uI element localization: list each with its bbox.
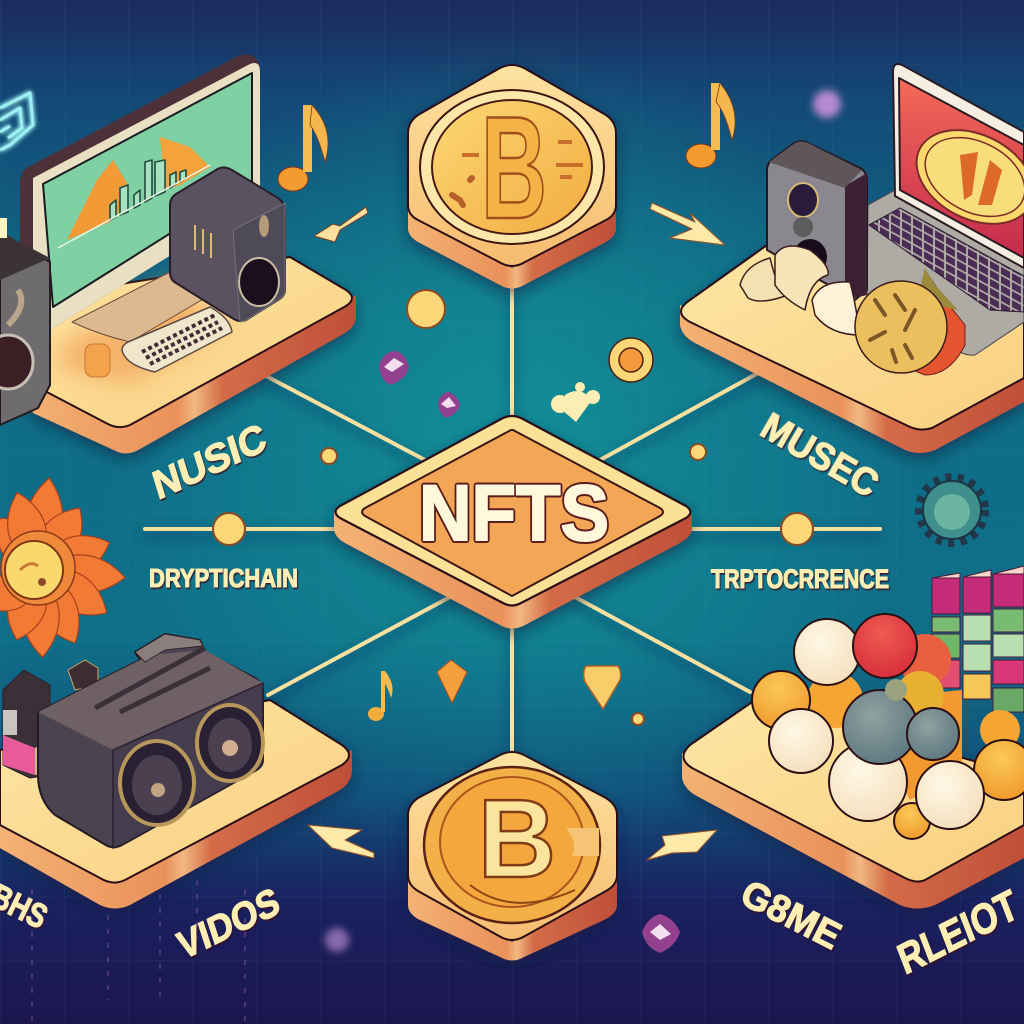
arrow bottom-right bbox=[647, 830, 717, 860]
gear badge icon bbox=[920, 478, 984, 542]
arrow bottom-left bbox=[308, 825, 374, 858]
coin letter: B bbox=[481, 86, 547, 249]
labels bbox=[0, 405, 1024, 983]
ring icon bbox=[609, 338, 653, 382]
glowing purple orbs bbox=[325, 90, 841, 952]
connector lines bbox=[145, 285, 880, 752]
platform bbox=[20, 257, 356, 453]
arrow top-left bbox=[314, 207, 368, 242]
panel: top-left platform with monitor and speakers bbox=[0, 55, 356, 453]
title: NFTS bbox=[419, 468, 609, 557]
platform bbox=[0, 700, 352, 908]
monitor bbox=[20, 55, 260, 342]
small boxes bbox=[3, 660, 98, 778]
label MUSEC: MUSEC bbox=[754, 405, 885, 506]
bottom coin hexagon bbox=[408, 752, 617, 960]
arrow top-right bbox=[650, 203, 725, 245]
speaker bbox=[767, 141, 867, 300]
label TRPTOCRRENCE: TRPTOCRRENCE bbox=[711, 564, 889, 594]
left speaker bbox=[0, 218, 50, 425]
cut tomato bbox=[855, 268, 965, 375]
node dots bbox=[213, 290, 813, 725]
top coin hexagon bbox=[408, 65, 616, 288]
spheres bbox=[752, 614, 1024, 839]
heart icon bbox=[551, 382, 600, 422]
music note top-left bbox=[278, 105, 328, 191]
label DRYPTICHAIN: DRYPTICHAIN bbox=[149, 563, 298, 593]
panel: top-right platform with laptop, speaker and food bbox=[680, 64, 1024, 453]
laptop bbox=[867, 64, 1024, 355]
speaker bbox=[170, 168, 285, 322]
platform bbox=[680, 245, 1024, 453]
keyboard bbox=[122, 307, 232, 372]
coin letter: B bbox=[478, 777, 556, 901]
neon circuit icon bbox=[0, 93, 33, 150]
orange gem icons bbox=[437, 660, 621, 709]
music note bottom bbox=[368, 671, 393, 721]
label G8ME: G8ME bbox=[734, 873, 847, 958]
panel: bottom-right platform with spheres and bars bbox=[682, 566, 1024, 908]
title: NFTS bbox=[419, 468, 609, 557]
platform bbox=[682, 700, 1024, 908]
stacked bars bbox=[932, 566, 1024, 712]
purple gems bbox=[379, 351, 680, 953]
flower icon bbox=[0, 476, 127, 658]
radio bbox=[38, 634, 263, 848]
music note top-right bbox=[686, 83, 735, 168]
food shells bbox=[740, 246, 860, 335]
label VIDOS: VIDOS bbox=[172, 879, 285, 969]
knob bbox=[85, 344, 110, 377]
central NFTS diamond bbox=[334, 416, 692, 628]
panel: bottom-left platform with radio bbox=[0, 634, 352, 908]
label NUSIC: NUSIC bbox=[148, 416, 271, 509]
